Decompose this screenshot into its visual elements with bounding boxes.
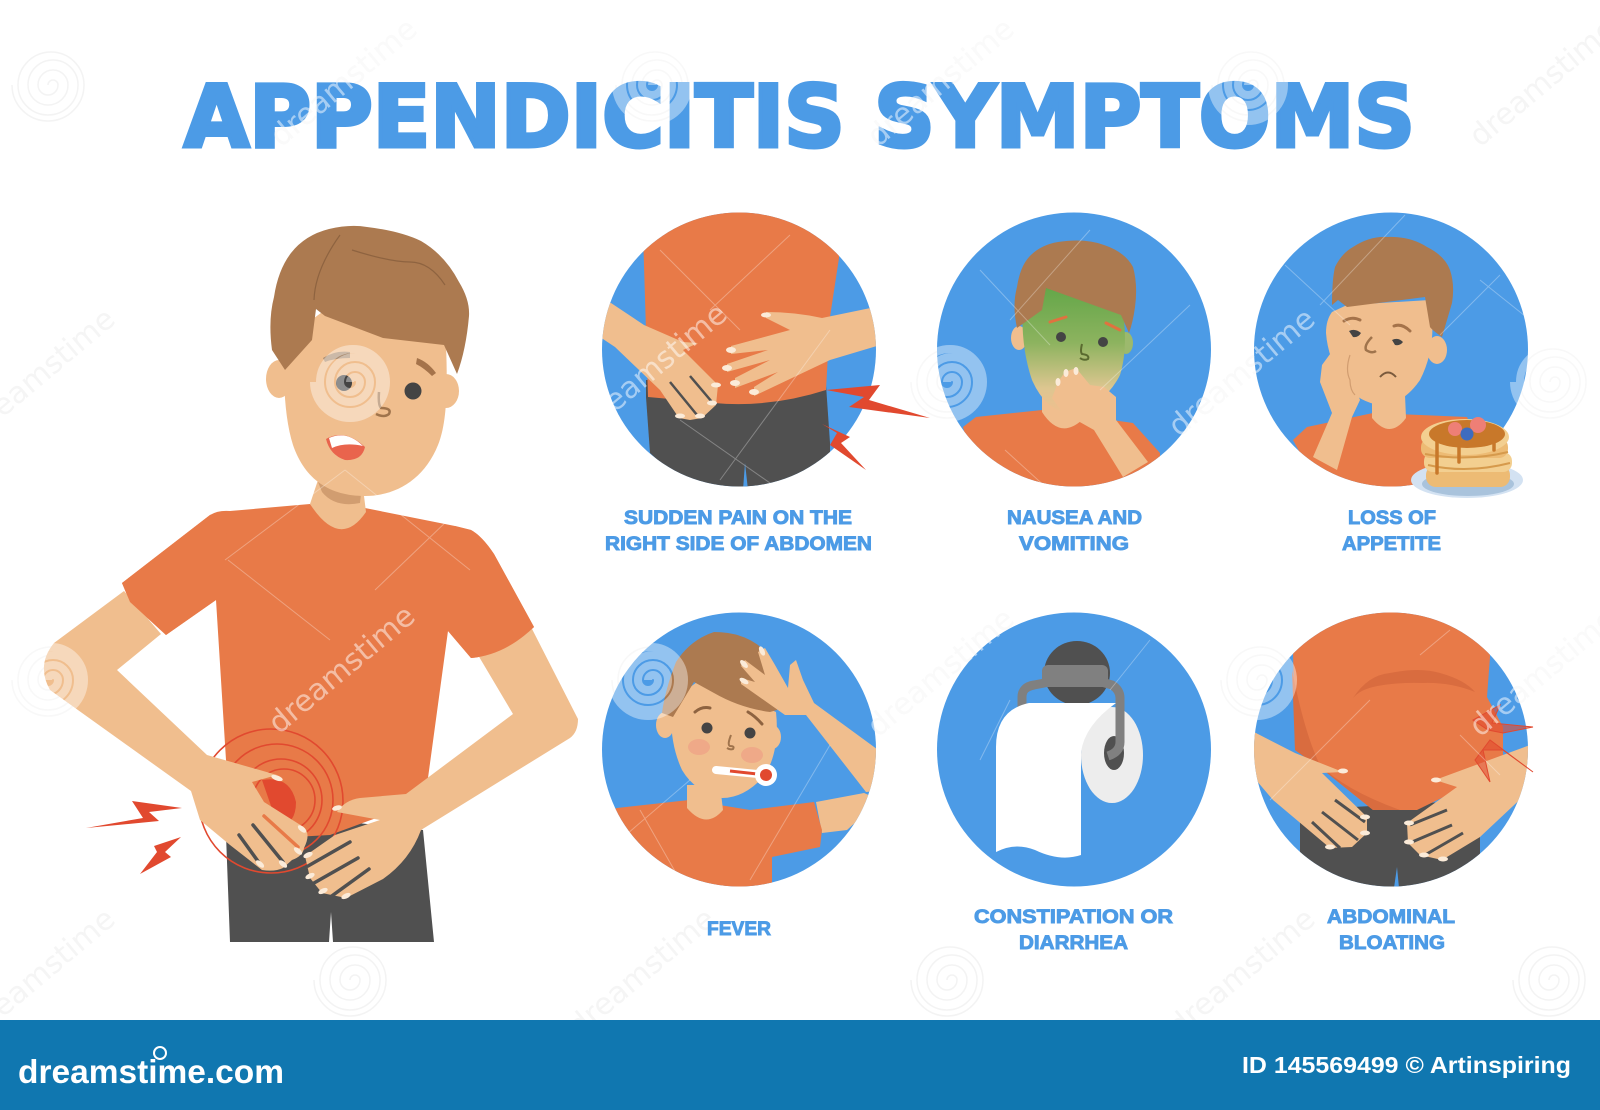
text: dreamstime bbox=[562, 901, 722, 1044]
footer band bbox=[0, 1020, 1600, 1110]
head bbox=[266, 226, 469, 496]
text: dreamstime bbox=[574, 296, 734, 439]
pain bolt large bbox=[86, 801, 182, 828]
label: loss of appetite: APPETITE bbox=[1342, 533, 1441, 555]
footer logo text: dreamstime.com bbox=[18, 1053, 284, 1090]
trousers bbox=[226, 820, 434, 942]
label: nausea: VOMITING bbox=[1019, 533, 1129, 555]
label: nausea bbox=[1007, 507, 1142, 555]
text: dreamstime bbox=[264, 11, 424, 154]
text: dreamstime bbox=[262, 598, 422, 741]
label: loss of appetite: LOSS OF bbox=[1348, 507, 1436, 529]
left arm and hand bbox=[44, 591, 308, 871]
text: dreamstime bbox=[861, 601, 1021, 744]
label: constipation: DIARRHEA bbox=[1019, 932, 1128, 954]
right arm and hand bbox=[302, 625, 578, 900]
panel: abdominal bloating bbox=[1250, 600, 1533, 890]
label: sudden pain: RIGHT SIDE OF ABDOMEN bbox=[605, 533, 872, 555]
orange t-shirt bbox=[122, 504, 534, 840]
pain rings bbox=[199, 729, 343, 873]
neck bbox=[310, 480, 366, 529]
panel: toilet paper bbox=[937, 612, 1211, 886]
pain bolt small bbox=[140, 837, 181, 874]
label: loss of appetite bbox=[1342, 507, 1441, 555]
text: dreamstime bbox=[861, 601, 1021, 744]
label: sudden pain: SUDDEN PAIN ON THE bbox=[624, 507, 852, 529]
pancakes on plate bbox=[1411, 417, 1523, 498]
footer credit: ID 145569499 © Artinspiring bbox=[1242, 1052, 1571, 1078]
pain bolt bbox=[826, 385, 930, 418]
text: dreamstime bbox=[861, 11, 1021, 154]
text: dreamstime bbox=[1162, 301, 1322, 444]
label: bloating: BLOATING bbox=[1339, 932, 1445, 954]
panel: fever bbox=[600, 612, 885, 890]
label: fever: FEVER bbox=[707, 918, 771, 940]
panel: nausea bbox=[937, 212, 1211, 490]
title: APPENDICITIS SYMPTOMS bbox=[184, 68, 1415, 168]
text: dreamstime bbox=[1162, 301, 1322, 444]
text: dreamstime bbox=[264, 11, 424, 154]
sleeves bbox=[122, 511, 534, 658]
label: constipation: CONSTIPATION OR bbox=[974, 906, 1173, 928]
label: bloating bbox=[1327, 906, 1455, 954]
text: dreamstime bbox=[861, 11, 1021, 154]
label: sudden pain bbox=[605, 507, 872, 555]
text: dreamstime bbox=[1162, 901, 1322, 1044]
pain bolt small bbox=[822, 424, 866, 470]
panel: loss of appetite bbox=[1254, 212, 1528, 498]
label: constipation bbox=[974, 906, 1173, 954]
main figure: boy holding abdomen bbox=[44, 226, 578, 942]
label: nausea: NAUSEA AND bbox=[1007, 507, 1142, 529]
pain bolts bbox=[1473, 705, 1533, 782]
panel: sudden pain bbox=[600, 200, 930, 500]
label: bloating: ABDOMINAL bbox=[1327, 906, 1455, 928]
